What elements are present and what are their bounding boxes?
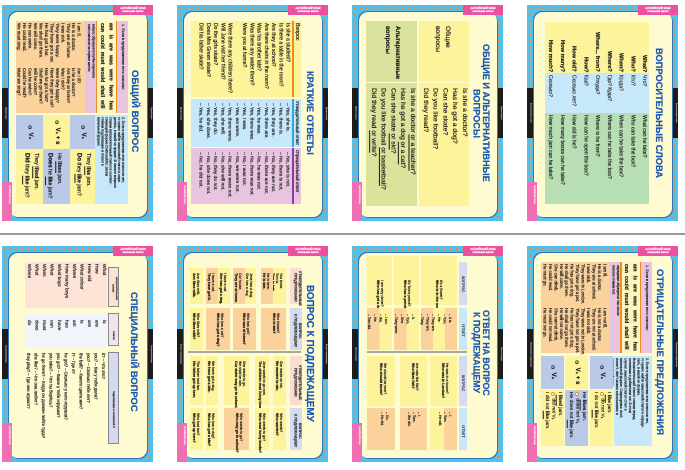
side tab: Английский язык: [533, 426, 536, 445]
example did: They liked jam. Did they like jam?: [24, 153, 39, 197]
form V2: ☺ V₂: [27, 125, 33, 139]
answers: – No, she is not. – No, there is not. – No, they are not. – No, there are not. – No, he was not. – No, there was not. – No, I was not. – No, we were not. – No, there were not. – No, she will not. – No, they do not. – No, she does not. – No, he did not.: [198, 152, 290, 198]
lower row 5 question: Who had two? Who got up here?: [192, 413, 200, 443]
right binder tab: [322, 329, 328, 379]
title: ОБЩИЙ ВОПРОС: [129, 70, 140, 153]
mid divider: [188, 351, 301, 352]
publisher tab: начальная школа: [472, 10, 494, 13]
side tab: Английский язык: [533, 185, 536, 204]
row 1 question: [421, 256, 457, 305]
lower row 2 question: Who wants to go? Who read funny books?: [258, 413, 266, 453]
row 2 accent: Our house. They are at home.: [234, 273, 242, 303]
poster: вопрос к подлежащему: [177, 246, 328, 462]
poster: краткие ответы: [177, 5, 328, 221]
lower row 1 question: He was in a house? Who was in London?: [441, 363, 449, 398]
head: question 1: ВОПРОС К ПОДЛЕЖАЩЕМУ: [293, 314, 302, 347]
left binder tab: [177, 88, 182, 138]
form V1 + s: ☺ V₁ + s: [54, 120, 60, 144]
row 4 statement: [190, 268, 203, 304]
questions: Is she a student? Is there a table in the room? Are they at school? Are there chairs in the room? Was his brother late? Was there any water there? Were you at home? Were there any children there? Will Jane visit her friend? Do the girls skate? Does Mrs Green skate? Did his father skate?: [198, 23, 291, 93]
example does not: He likes jam. does not V₁ He does not like jam.: [568, 392, 586, 439]
example did not: I liked jam. did not V₁ I did not like jam.: [544, 392, 562, 430]
poster: ответ на вопрос к подлежащему: [352, 246, 503, 462]
form V1: ☺ V₁: [80, 125, 86, 139]
lower row 5 statement: [190, 356, 203, 405]
cream page: [8, 252, 147, 458]
row 4 statement: Ann likes milk. Ann likes milk.: [192, 273, 200, 298]
form V1 + s: [565, 356, 588, 389]
lower row 1 answer: [430, 408, 457, 450]
row 2 answer: [394, 308, 419, 350]
verbs: [25, 314, 107, 347]
right binder tab: [672, 329, 678, 379]
answers: – It is. – Tom. – He. – They are. – They are. – They.: [420, 314, 452, 332]
orange rule: [292, 21, 294, 97]
purple rule: [292, 148, 294, 204]
example do not: I like jam. do not V₁ I do not like jam.: [593, 392, 611, 428]
title: ОТРИЦАТЕЛЬНЫЕ ПРЕДЛОЖЕНИЯ: [654, 269, 665, 436]
lower row 2 answer: – I. – Tom. – We did.: [407, 412, 421, 427]
title: К ПОДЛЕЖАЩЕМУ: [472, 312, 482, 393]
right binder tab: Общие вопросы: [500, 106, 502, 120]
lower row 2 question: Are cats like fish? Who likes fish?: [411, 363, 419, 390]
head: question 1: [459, 262, 467, 305]
row 2 question: [233, 308, 256, 350]
row 2 question: Who has got? Who was at home?: [242, 313, 250, 345]
publisher tab: АНГЛИЙСКИЙ ЯЗЫК: [470, 7, 496, 10]
pink note: отрицание образуется так: после глагола ставим not:: [612, 265, 620, 316]
publisher tab: [638, 5, 678, 15]
orange examples panel: [16, 21, 85, 113]
rule heading 1: 1. Если в предложении есть глаголы:: [645, 265, 649, 331]
publisher tab: [113, 5, 153, 15]
questions: Am I ill? Is he a doctor? Are they at home? Was I sick? Were they happy? Have they got a cat? Has he got a hat? Shall we go there? Will he come? Can he swim? Could he read? Must we sing?: [17, 68, 82, 107]
head: statement 1: [290, 268, 302, 304]
mid divider: [367, 351, 467, 352]
example did: [16, 149, 43, 204]
lower row 1 question: [273, 408, 286, 450]
right binder tab: Краткие ответы: [325, 107, 327, 119]
label: general questions: Общие вопросы: [434, 26, 451, 52]
lower row 2 question: [255, 408, 269, 450]
head: answer 2: [459, 408, 467, 450]
column head: verb: глагол: [112, 330, 116, 339]
row 3 question: Who has a cat? Who has got a dog?: [216, 313, 224, 346]
example does: [43, 149, 70, 204]
row 1 question: [261, 308, 286, 350]
row 3 answer: [367, 308, 392, 350]
head: question 2: ВОПРОС: [461, 375, 465, 391]
publisher tab: [463, 5, 503, 15]
left binder tab: Отрицательные предложения: [530, 342, 532, 366]
right binder tab: Общий вопрос: [150, 107, 152, 119]
publisher tab: начальная школа: [647, 10, 669, 13]
form V2: [541, 356, 564, 389]
cream page: [358, 252, 497, 458]
lower row 3 answer: [367, 408, 395, 450]
right binder tab: Отрицательные предложения: [675, 342, 677, 366]
lower row 5 question: [190, 408, 203, 450]
side tab: [2, 423, 12, 462]
lower row 3 question: [224, 408, 249, 450]
verb list: am is are was were have has can could must would shall will: [99, 23, 114, 110]
row 2 statement: [233, 268, 256, 304]
column head: verb: [108, 313, 119, 346]
row 2 accent: [233, 268, 245, 304]
label: alternative questions: [366, 21, 417, 82]
side tab: Английский язык: [358, 185, 361, 204]
side tab: [177, 423, 187, 462]
publisher tab: начальная школа: [297, 10, 319, 13]
row 3 question: I am very clever? Who has got a dog?: [376, 280, 384, 313]
cream page: [534, 252, 672, 458]
answers: – Yes, she is. – Yes, there is. – Yes, they are. – Yes, there are. – Yes, he was. – Yes, there was. – Yes, I was. – Yes, we were. – Yes, there were. – Yes, she will. – Yes, they do. – Yes, she does. – Yes, he did.: [198, 103, 290, 142]
lower row 3 statement: [224, 356, 249, 405]
publisher tab: АНГЛИЙСКИЙ ЯЗЫК: [120, 248, 146, 251]
answers: – It. – Tom. – She. – They were.: [394, 314, 415, 334]
side tab: [177, 182, 187, 221]
alternative question examples: Is she a doctor or a teacher ? Has he got a dog or a cat ? Can she skate or ski ? Do you like football or basketball ? Did they read or write ?: [370, 88, 416, 190]
form V1 + s: ☺ V₁ + s: [574, 360, 580, 385]
row 2 question: [394, 256, 419, 305]
left binder tab: Специальный вопрос: [4, 345, 6, 363]
row 3 accent: I have a cat. They have got it.: [207, 273, 215, 301]
right binder tab: [322, 88, 328, 138]
side tab: [2, 182, 12, 221]
lower row 3 question: [367, 356, 395, 406]
lower row 4 question: Who has a dog? Who has got a kite?: [207, 413, 215, 446]
general question examples: Is she a doctor? Has he got a dog? Can she skate? Do you like football? Did they read?: [422, 88, 468, 149]
lower row 5 statement: The father had two. His father got up here.: [192, 361, 200, 398]
row 1 statement: [261, 268, 286, 304]
orange rule: [640, 262, 641, 353]
publisher tab: АНГЛИЙСКИЙ ЯЗЫК: [645, 7, 671, 10]
head: question 1: ВОПРОС: [461, 276, 465, 293]
lower row 3 answer: – Go. – He did.: [380, 412, 389, 426]
example does not: [565, 390, 588, 446]
right binder tab: Вопрос к подлежащему: [325, 344, 327, 364]
left binder tab: [177, 329, 182, 379]
column heading: Отрицательный ответ: [295, 150, 300, 192]
page divider: [0, 233, 685, 235]
poster: вопросительные слова: [527, 5, 678, 221]
right binder tab: [148, 88, 153, 138]
form V1: [590, 356, 613, 389]
lower row 1 question: Who wants? Who wanted?: [275, 413, 283, 436]
title: ОБЩИЕ И АЛЬТЕРНАТИВНЫЕ: [481, 44, 491, 182]
left binder tab: [2, 329, 8, 379]
row 2 statement: Jane has a dog. She has a dog. Jane has a dog.: [241, 273, 253, 299]
cream page: [534, 12, 672, 217]
right binder tab: [672, 88, 678, 138]
head: question 2: [459, 356, 467, 406]
orange rule: [96, 21, 97, 113]
left binder tab: [527, 88, 532, 138]
cream page: [184, 252, 322, 458]
lower row 2 question: [400, 356, 427, 406]
side tab: Английский язык: [183, 426, 186, 445]
verb list: am is are was were have has can could must would shall will: [623, 264, 638, 351]
row 1 question: Who knows? Who is late?: [272, 313, 280, 334]
side tab: Английский язык: [183, 185, 186, 204]
side tab: Английский язык: [358, 426, 361, 445]
side tab: [527, 423, 537, 462]
example questions: What can he take? Who can take the box? When can he take the box? Where can he take the box? Where is he from? How can he open the box? How old is he? How many boxes can he take? How much jam can he take?: [547, 115, 647, 185]
publisher tab: начальная школа: [122, 251, 144, 254]
form V1 + s: [43, 115, 70, 149]
translations: Что? Кто? Когда? Где? Куда? Откуда? Как? Сколько лет? Сколько?: [547, 75, 647, 106]
blue rule: [292, 99, 294, 147]
poster: специальный вопрос: [2, 246, 153, 462]
column head: subject: [108, 352, 119, 444]
left binder tab: [527, 329, 532, 379]
publisher tab: [113, 246, 153, 256]
lower row 1 statement: She wants an ink. We wanted to win.: [275, 361, 283, 391]
title: ВОПРОС К ПОДЛЕЖАЩЕМУ: [304, 285, 315, 422]
cream page: [358, 12, 497, 217]
lower row 2 statement: [255, 356, 269, 405]
row 3 statement: [206, 268, 230, 304]
form V2: ☺ V₂: [550, 365, 556, 380]
publisher tab: АНГЛИЙСКИЙ ЯЗЫК: [470, 248, 496, 251]
lower row 1 statement: [273, 356, 286, 405]
example do not: [590, 390, 613, 446]
row 4 question: Who likes milk? Who likes milk?: [192, 313, 200, 339]
answers: – I am. – We. – He. – Tom did.: [367, 314, 388, 330]
head: question 2: [290, 408, 302, 450]
left binder tab: [352, 88, 358, 138]
rule heading 1: [117, 21, 128, 113]
left binder tab: Краткие ответы: [180, 107, 182, 119]
publisher tab: [288, 5, 328, 15]
lower row 3 question: We should be near? Who should know?: [379, 363, 387, 395]
column head: subject: подлежащее и основной V: [112, 391, 116, 427]
poster: общие и альтернативные вопросы: [352, 5, 503, 221]
left binder tab: Вопрос к подлежащему: [180, 344, 182, 364]
rule 2 panel: 2. Если в предложении этих глаголов нет, то нужно найти смысловой глагол и опре- делить, в какой он форме. В начале вопроса ставим вспомогательный глагол в соответ- ствующей форме Do/Does/Did. Затем ставим подлежащее и глагол в начальной форме.: [96, 117, 125, 188]
row 1 accent: [261, 268, 273, 304]
orange rule: [116, 21, 117, 113]
answers: – I. – Tom. – He will.: [438, 412, 452, 426]
publisher tab: АНГЛИЙСКИЙ ЯЗЫК: [295, 248, 321, 251]
side tab: [352, 423, 362, 462]
head: statement 1: УТВЕРДИТЕЛЬНЫЕ ПРЕДЛОЖЕНИЯ: [293, 271, 302, 306]
cream page: [184, 12, 322, 217]
left binder tab: Вопросительные слова: [530, 103, 532, 123]
publisher tab: начальная школа: [122, 10, 144, 13]
lower row 1 question: [430, 356, 457, 406]
label: alternative questions: Альтернативные вопросы: [384, 26, 401, 79]
side tab: Английский язык: [8, 185, 11, 204]
statements: I am ill. He is a doctor. They are at school. I was sick. They were in London. They have got a pet. He has got a dog. He shall go there. He will come. She can climb. He could read. He must go.: [542, 264, 607, 304]
form V1: [70, 115, 95, 149]
example do: [70, 149, 95, 204]
publisher tab: АНГЛИЙСКИЙ ЯЗЫК: [645, 248, 671, 251]
left binder tab: Ответ на вопрос: [354, 347, 356, 361]
left binder tab: [2, 88, 8, 138]
right binder tab: [148, 329, 153, 379]
title: ВОПРОСИТЕЛЬНЫЕ СЛОВА: [654, 48, 664, 178]
rule heading 1: 1. Если в предложении есть глаголы:: [121, 24, 125, 90]
publisher tab: АНГЛИЙСКИЙ ЯЗЫК: [295, 7, 321, 10]
head: question 2: ВОПРОС К ПОДЛЕЖАЩЕМУ: [293, 414, 302, 447]
negative statements: I am not ill. He is not a doctor. They are not at school. I was not sick. They were not in London. They have not got a pet. He has not got a dog. He shall not go there. He will not come. She cannot climb. He could not read. He must not go.: [542, 308, 607, 355]
right binder tab: Вопросительные слова: [675, 103, 677, 123]
row 2 question: It's Tom's pencil? Who has a pencil?: [403, 280, 411, 311]
example does: He likes jam. Does he like jam?: [46, 153, 62, 198]
row 1 statement: You know. Tom is. Tom is late.: [271, 273, 283, 292]
row 3 question: [206, 308, 230, 350]
pink note: [85, 21, 96, 113]
lower row 2 answer: [400, 408, 427, 450]
publisher tab: [638, 246, 678, 256]
publisher tab: [463, 246, 503, 256]
column heading: Утвердительный ответ: [295, 101, 300, 145]
form V1: ☺ V₁: [599, 365, 605, 380]
column heading: Вопрос: [294, 23, 300, 41]
completions: it? – Что это? you? – Как у тебя дела? you? – Сколько тебе лет? the ball? – Какого цвета мяч? I? – Где я? he got? – Сколько у него игрушек? you got? – Какие у тебя игрушки? you take? – Что ты берёшь? he go there? – Когда он должен пойти туда? she like? – Что она любит? they play? – Где они играют?: [26, 353, 106, 438]
right binder tab: Ответ на вопрос: [500, 347, 502, 361]
publisher tab: начальная школа: [297, 251, 319, 254]
rule 2 panel: [614, 356, 652, 446]
label: general questions: [419, 21, 469, 82]
example did not: [541, 390, 564, 446]
column head: question word: [108, 267, 119, 307]
statements: I am ill. He is a doctor. They are at home. I was sick. They were happy. They have got a cat. He has got a hat. We shall go there. We will come. He can swim. He could read. We must sing.: [17, 23, 82, 63]
side tab: Английский язык: [8, 426, 11, 445]
publisher tab: начальная школа: [647, 251, 669, 254]
row 1 question: It's a flower? Who is in the room?: [435, 280, 443, 314]
title: ОТВЕТ НА ВОПРОС: [481, 310, 491, 395]
head: statement 2: УТВЕРДИТЕЛЬНЫЕ ПРЕДЛОЖЕНИЯ: [293, 365, 302, 399]
rule 2 panel: 2. Если в предложении этих глаголов нет, то нужно найти смысловой глагол и опреде- лить, в какой он форме. Вспомогательный глагол ставим перед основным и добавляем not. В этом случае смысловой глагол стоит в начальной форме. Сокращения: don't, doesn't, didn't можно использовать в разговорной речи.: [611, 358, 649, 428]
question words: What? Who? When? Where? Where... from? How? How old? How many? How much?: [547, 32, 647, 72]
rule 2 panel: [95, 115, 128, 204]
left binder tab: [352, 329, 358, 379]
title: [471, 310, 491, 396]
title: СПЕЦИАЛЬНЫЙ ВОПРОС: [129, 292, 140, 412]
negative answers column: [191, 148, 301, 204]
head: question 1: [290, 308, 302, 350]
head: answer 2: ОТВЕТ: [461, 425, 465, 437]
head: statement 2: [290, 356, 302, 405]
row 4 question: [190, 308, 203, 350]
right binder tab: Специальный вопрос: [150, 345, 152, 363]
pink note: вопрос образуется путём переноса этих глаголов на первое место:: [87, 24, 96, 78]
orange examples panel: [541, 262, 609, 353]
title: КРАТКИЕ ОТВЕТЫ: [305, 71, 315, 155]
example do: They like jam. Do they like jam?: [76, 153, 91, 196]
side tab: [527, 182, 537, 221]
publisher tab: начальная школа: [472, 251, 494, 254]
lower row 3 statement: She wants to go. We shall be late. Our sister may go to school.: [234, 361, 246, 408]
column head: question word: вопросительное слово: [111, 277, 119, 300]
row 1 answer: [421, 308, 457, 350]
head: answer 1: ОТВЕТ: [461, 324, 465, 336]
lower row 2 statement: Jane wants to go now. The children read funny books.: [258, 361, 266, 413]
row 3 accent: [206, 268, 218, 304]
lower row 4 statement: We have got a dog. We have got a kite.: [207, 361, 215, 392]
publisher tab: [288, 246, 328, 256]
head: answer 1: [459, 308, 467, 350]
question column: [191, 21, 301, 97]
orange rule: [620, 262, 622, 353]
lower row 3 question: Who wants to go? Who may go to school?: [235, 413, 243, 452]
row 1 accent: He is here. He is late.: [262, 273, 270, 290]
publisher tab: АНГЛИЙСКИЙ ЯЗЫК: [120, 7, 146, 10]
positive answers column: [191, 99, 301, 147]
form V2: [16, 115, 43, 149]
left binder tab: Общие вопросы: [354, 106, 356, 120]
title: [472, 44, 491, 182]
title: ВОПРОСЫ: [472, 89, 482, 137]
row 3 question: [367, 256, 392, 305]
side tab: [352, 182, 362, 221]
right binder tab: [498, 88, 503, 138]
lower row 4 question: [206, 408, 218, 450]
verbs: is are are is am has have can must does do: [26, 320, 106, 330]
row 3 statement: I have a cat. She has got a dog.: [219, 273, 227, 304]
left binder tab: Общий вопрос: [4, 107, 6, 119]
cream page: [8, 12, 147, 217]
lower row 4 statement: [206, 356, 218, 405]
question words: What How How old What colour Where How many boys What boys What When What Where: [26, 264, 106, 298]
rule heading 1: [641, 262, 652, 353]
poster: отрицательные предложения: [527, 246, 678, 462]
poster: общий вопрос: [2, 5, 153, 221]
pink note: [609, 262, 620, 353]
right binder tab: [498, 329, 503, 379]
general question examples: [419, 83, 469, 206]
